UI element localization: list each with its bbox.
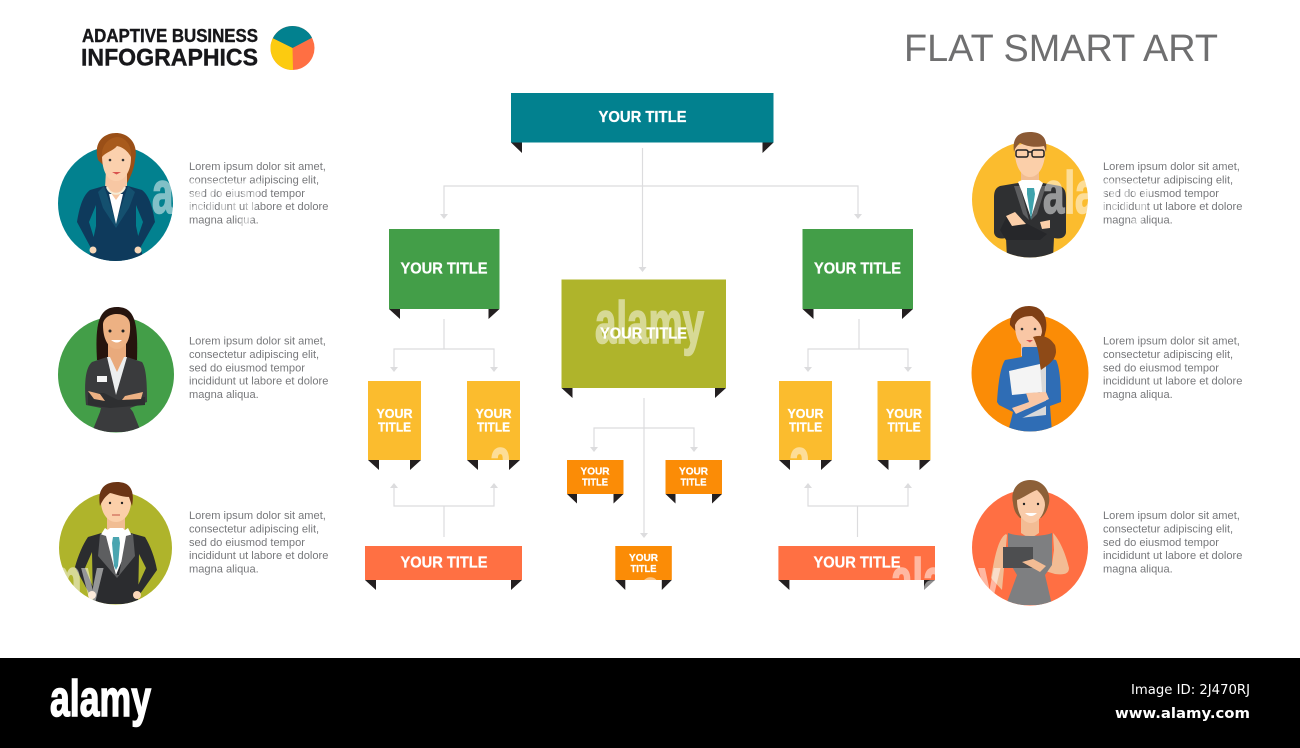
image id: Image ID: 2J470RJ	[1131, 682, 1250, 698]
panel: yellow box 2	[467, 381, 520, 470]
connectors and arrows	[390, 148, 912, 538]
footer logo: alamy	[50, 670, 151, 727]
panel: small orange box left	[567, 460, 624, 504]
text block: left 1: consectetur adipiscing elit,	[189, 174, 319, 186]
footer bar	[0, 658, 1300, 748]
text block: right 1: incididunt ut labore et dolore	[1103, 201, 1242, 213]
panel: coral box left: YOUR TITLE	[400, 554, 488, 572]
panel: yellow box 3	[779, 381, 832, 470]
panel: centre olive box: YOUR TITLE	[600, 326, 687, 342]
icon: pie chart	[270, 26, 314, 70]
brand name	[81, 26, 258, 72]
text block: left 2: sed do eiusmod tempor	[189, 362, 305, 374]
text block: right 2: sed do eiusmod tempor	[1103, 362, 1219, 374]
person: coral woman	[972, 480, 1088, 606]
panel: yellow box 4: YOUR	[886, 406, 923, 421]
panel: left green box: YOUR TITLE	[400, 260, 488, 278]
text block: right 2: Lorem ipsum dolor sit amet,	[1103, 336, 1240, 348]
text block: right 1: sed do eiusmod tempor	[1103, 188, 1219, 200]
text block: left 2: incididunt ut labore et dolore	[189, 376, 328, 388]
panel: yellow box 4	[878, 381, 930, 470]
heading: flat smart art: FLAT SMART ART	[904, 28, 1218, 70]
brand name: INFOGRAPHICS	[81, 44, 258, 72]
panel: small orange box bottom: YOUR	[629, 552, 658, 564]
website: www.alamy.com	[1115, 706, 1250, 722]
brand logo	[81, 26, 314, 72]
panel: small orange box left: YOUR	[580, 466, 610, 478]
person: teal woman	[58, 133, 173, 262]
panel: coral box right: YOUR TITLE	[814, 554, 900, 572]
panel: top title box: YOUR TITLE	[598, 109, 686, 126]
panel: left green box	[389, 229, 500, 319]
text block: right 3: consectetur adipiscing elit,	[1103, 523, 1233, 535]
text block: right 3: magna aliqua.	[1103, 564, 1173, 576]
text block: left 3: consectetur adipiscing elit,	[189, 523, 319, 535]
text block: right 3: sed do eiusmod tempor	[1103, 537, 1219, 549]
panel: small orange box right: YOUR	[679, 466, 708, 478]
text block: left 3: sed do eiusmod tempor	[189, 537, 305, 549]
person: green woman	[58, 307, 174, 432]
person: olive man	[59, 482, 172, 604]
text block: left 3: incididunt ut labore et dolore	[189, 550, 328, 562]
panel: small orange box bottom: TITLE	[630, 563, 656, 575]
panel: yellow box 4: TITLE	[888, 420, 921, 434]
panel: small orange box right: TITLE	[680, 476, 706, 488]
text block: left 2: Lorem ipsum dolor sit amet,	[189, 336, 326, 348]
text block: right 1: Lorem ipsum dolor sit amet,	[1103, 161, 1240, 173]
text block: right 3: incididunt ut labore et dolore	[1103, 550, 1242, 562]
panel: top title box	[511, 93, 774, 153]
panel: yellow box 1: YOUR	[376, 406, 413, 421]
panel: yellow box 3: TITLE	[789, 420, 822, 434]
panel: small orange box right	[666, 460, 722, 504]
text block: left 2: magna aliqua.	[189, 389, 259, 401]
watermark overlays: alamy	[1043, 160, 1152, 226]
panel: coral box left	[365, 546, 522, 590]
panel: small orange box left: TITLE	[582, 476, 608, 488]
text block: left 1: sed do eiusmod tempor	[189, 188, 305, 200]
watermark overlays: alamy	[152, 160, 261, 226]
text block: left 3: Lorem ipsum dolor sit amet,	[189, 510, 326, 522]
brand name: ADAPTIVE BUSINESS	[82, 26, 258, 46]
person: yellow man	[972, 132, 1088, 258]
panel: coral box right	[778, 546, 935, 590]
panel: yellow box 2: a	[490, 427, 512, 493]
panel: yellow box 3: a	[789, 427, 811, 493]
text block: left 1: Lorem ipsum dolor sit amet,	[189, 161, 326, 173]
panel: small orange box bottom: a	[640, 557, 662, 623]
panel: yellow box 2: YOUR	[476, 406, 512, 421]
panel: right green box	[802, 229, 913, 319]
text block: right 2: incididunt ut labore et dolore	[1103, 376, 1242, 388]
text block: left 1: incididunt ut labore et dolore	[189, 201, 328, 213]
panel: small orange box bottom	[615, 546, 672, 590]
panel: yellow box 1: TITLE	[378, 420, 411, 434]
text block: left 3: magna aliqua.	[189, 564, 259, 576]
panel: yellow box 3: YOUR	[788, 406, 824, 421]
panel: yellow box 2: TITLE	[477, 420, 510, 434]
panel: yellow box 1	[368, 381, 421, 470]
text block: right 1: consectetur adipiscing elit,	[1103, 174, 1233, 186]
person: orange woman	[972, 306, 1088, 432]
panel: right green box: YOUR TITLE	[814, 260, 901, 278]
text block: right 2: magna aliqua.	[1103, 389, 1173, 401]
panel: centre olive box: alamy	[595, 290, 704, 356]
text block: left 1: magna aliqua.	[189, 215, 259, 227]
text block: right 1: magna aliqua.	[1103, 215, 1173, 227]
panel: centre olive box	[562, 280, 726, 398]
text block: left 2: consectetur adipiscing elit,	[189, 349, 319, 361]
watermark overlays	[0, 160, 1152, 613]
text block: right 3: Lorem ipsum dolor sit amet,	[1103, 510, 1240, 522]
text block: right 2: consectetur adipiscing elit,	[1103, 349, 1233, 361]
watermark overlays: alamy	[891, 547, 1000, 613]
